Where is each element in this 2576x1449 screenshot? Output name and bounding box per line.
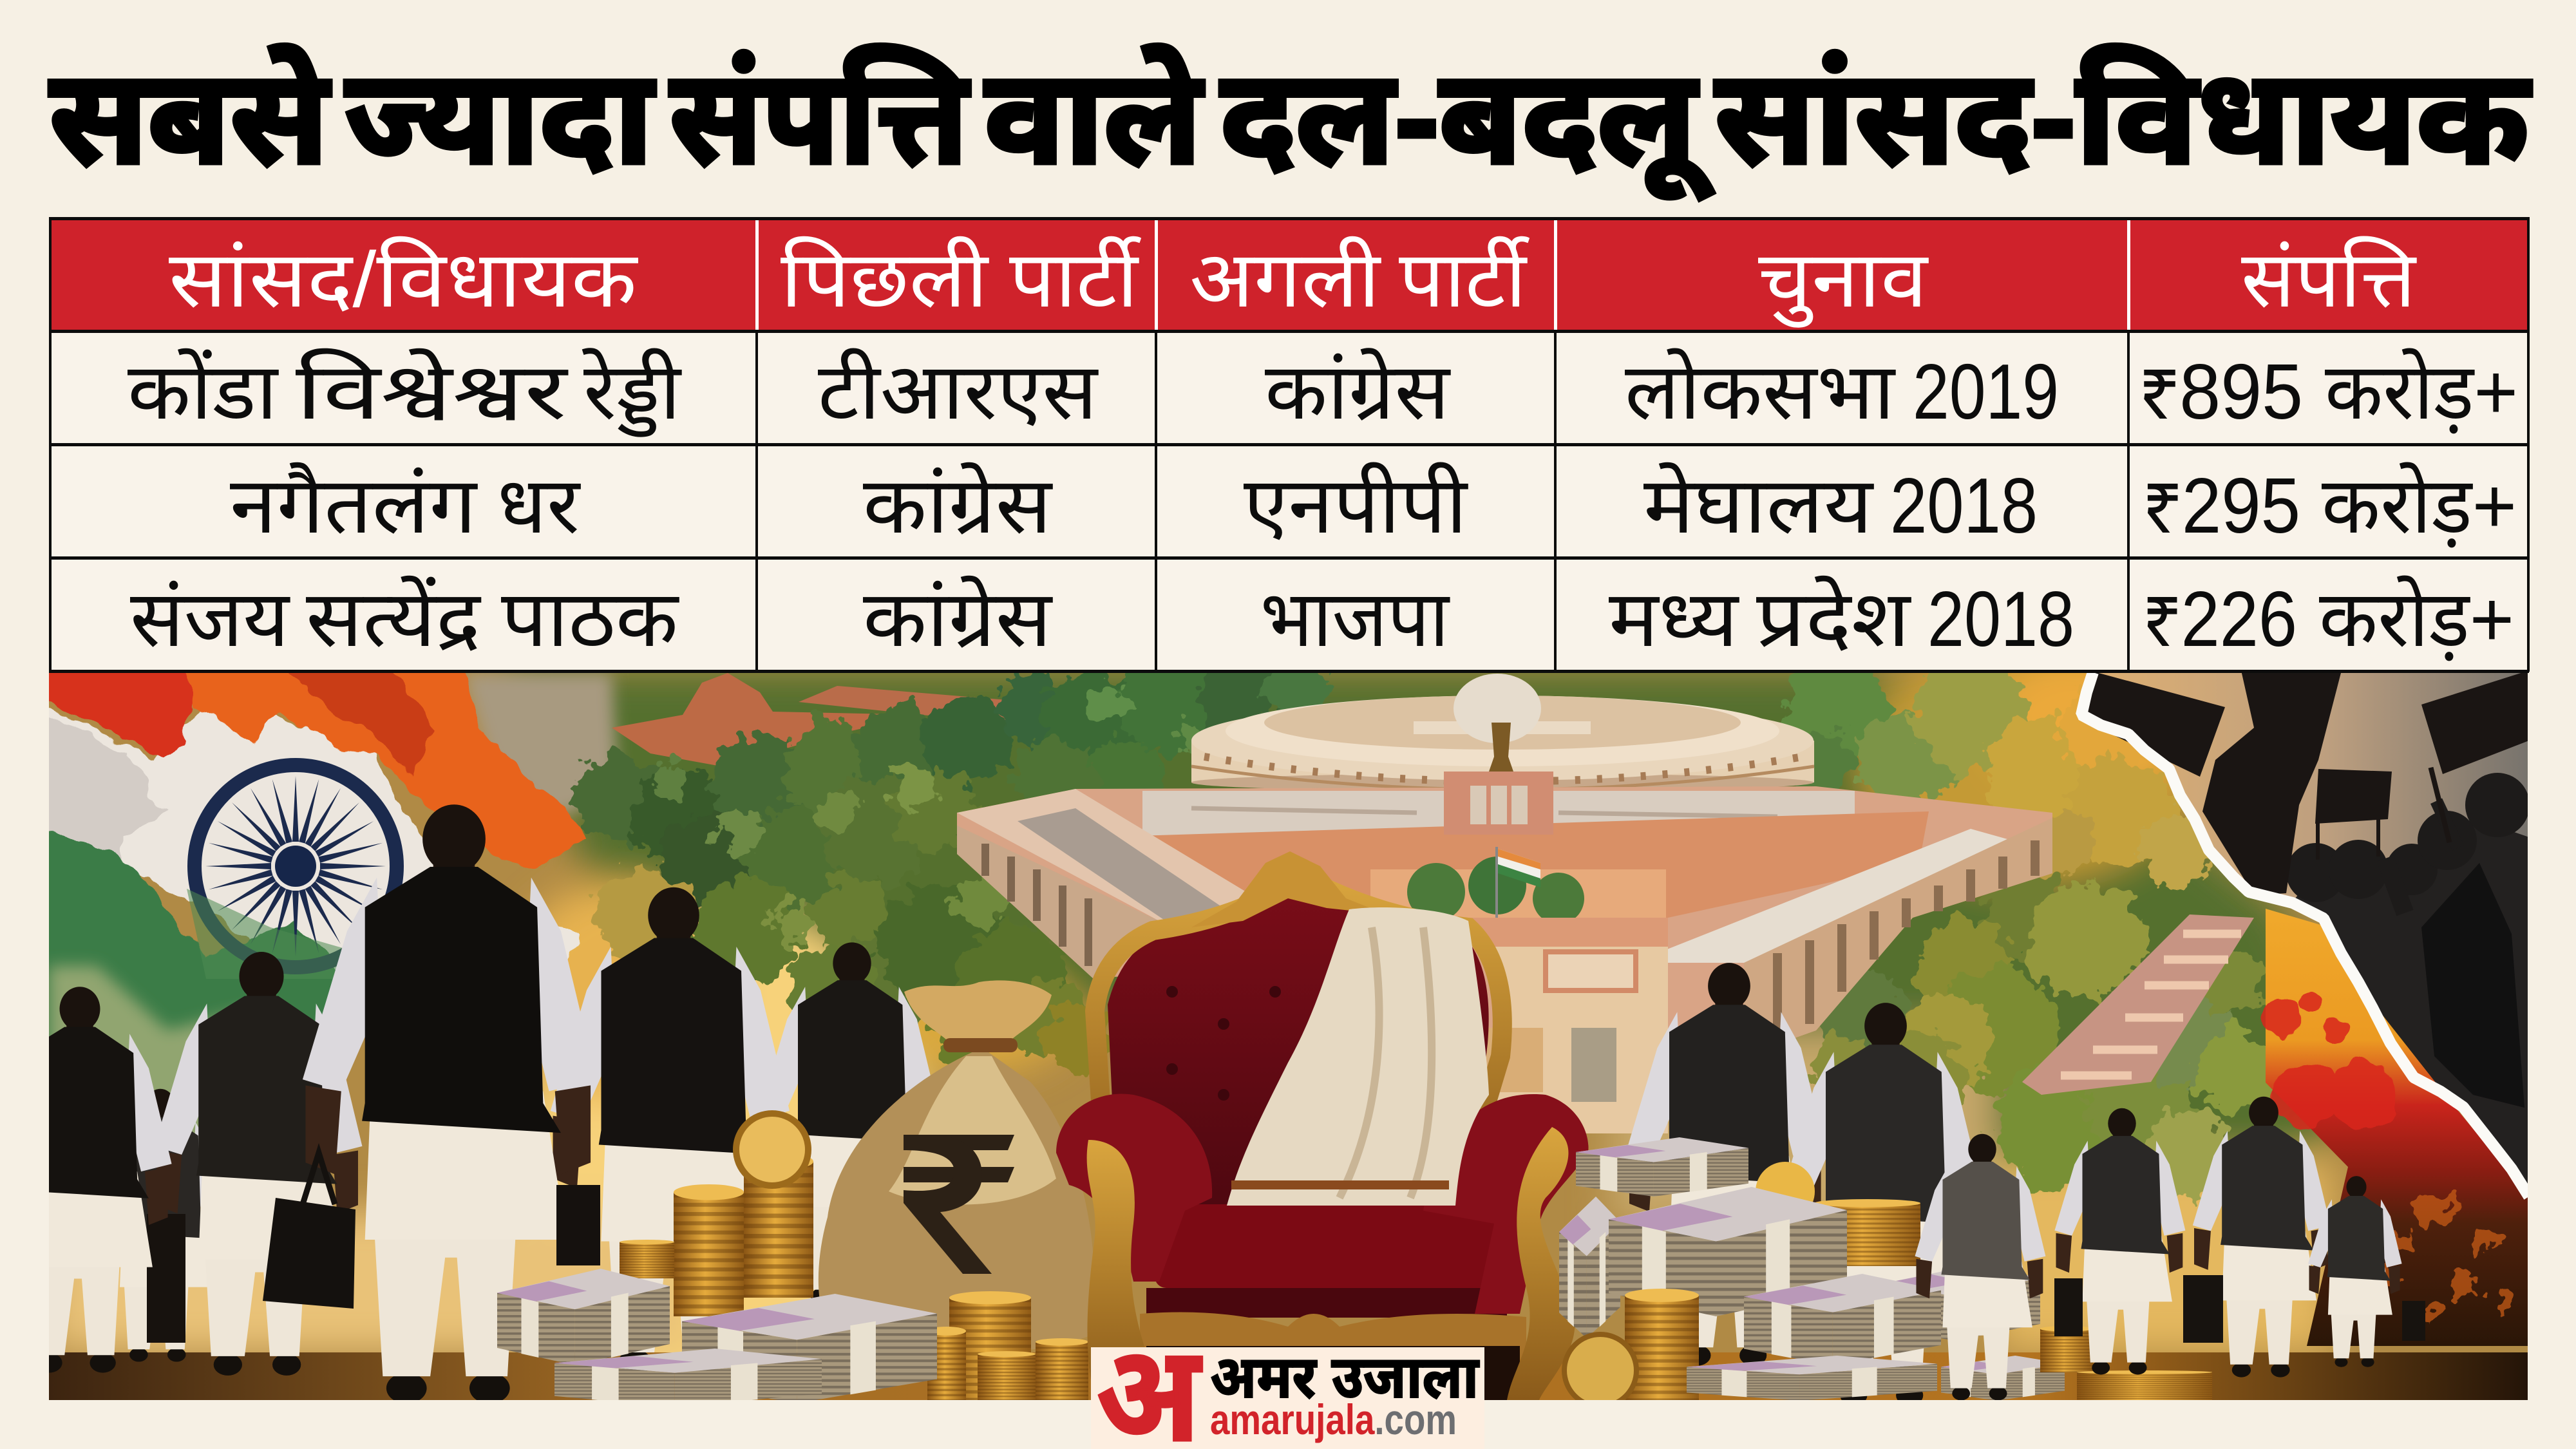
table header row: संपत्ति (2241, 236, 2418, 323)
table row 1: लोकसभा (1625, 348, 1896, 435)
men walking: distant figures (91, 1089, 225, 1362)
table row 1: कोंडा (128, 348, 279, 435)
chair crest (1191, 851, 1387, 927)
logo (1091, 1318, 1484, 1449)
table row 3: करोड़+ (2319, 575, 2514, 663)
table row 1: कांग्रेस (1265, 348, 1452, 435)
table header row (50, 220, 2528, 330)
table header row: पिछली (781, 236, 990, 323)
man 1 (0, 987, 172, 1373)
table header row: पार्टी (1399, 236, 1530, 323)
terracotta walls (1095, 811, 1929, 921)
title: वाले (985, 44, 1204, 191)
cash bundles right (1559, 1137, 2212, 1406)
table row 2: ₹295 (2143, 462, 2300, 549)
torn panel: protest crowd (2081, 670, 2530, 1197)
man 9 (2054, 1108, 2185, 1374)
table row 2: धर (497, 462, 581, 549)
table row 2: 2018 (1890, 462, 2038, 549)
table row 2 (230, 462, 2517, 549)
table row 2: कांग्रेस (863, 462, 1054, 549)
table row 1 (128, 348, 2518, 437)
man 5 (760, 942, 938, 1306)
courtyard trees and flag (1407, 847, 1584, 924)
man 10 (2183, 1097, 2331, 1378)
table header row: पार्टी (1009, 236, 1142, 323)
table row 3: भाजपा (1260, 575, 1450, 663)
front block (1385, 918, 1668, 953)
bag near man 4 (556, 1185, 600, 1265)
title: सांसद-विधायक (1715, 44, 2532, 191)
man 4 (551, 887, 790, 1374)
right arm (1423, 1094, 1588, 1314)
table row 2: करोड़+ (2322, 462, 2517, 549)
table row 1: रेड्डी (582, 348, 682, 437)
table row 1: ₹895 (2139, 348, 2303, 435)
man 11 (2308, 1176, 2425, 1367)
table row 1: 2019 (1913, 348, 2059, 435)
right wing roof (1633, 829, 2023, 963)
logo wordmark hindi: अमर उजाला (1210, 1345, 1480, 1410)
man 6 (1627, 963, 1825, 1366)
rupee symbol on bag (904, 1135, 1014, 1274)
title: संपत्ति (670, 44, 970, 191)
trees (573, 650, 2277, 1198)
table header row: सांसद/विधायक (169, 236, 639, 323)
table row 1: टीआरएस (818, 348, 1099, 435)
left wing (957, 789, 1262, 921)
illustration panel (49, 673, 2528, 1400)
bag near man 7 (1958, 1240, 2019, 1294)
logo wordmark url: amarujala.com (1210, 1396, 1457, 1443)
table body background (49, 219, 2529, 672)
seat (1155, 1204, 1496, 1288)
chair back (1108, 886, 1489, 1211)
table row 2: नगैतलंग (230, 462, 478, 549)
distant red-sandstone buildings (464, 673, 1030, 818)
rotunda (1191, 674, 1814, 791)
parliament building (957, 674, 2052, 1133)
table row 3: संजय (130, 575, 290, 663)
indian flag painting (39, 663, 589, 1159)
crowd silhouettes (2286, 773, 2530, 1197)
garden staircase (2022, 914, 2254, 1095)
table row 1: करोड़+ (2325, 348, 2518, 435)
throne chair (1056, 851, 1588, 1404)
coins stacks left (620, 1113, 1088, 1401)
logo background (1091, 1347, 1484, 1449)
left arm (1056, 1094, 1212, 1282)
ashoka chakra (187, 765, 397, 979)
roof slabs (1142, 791, 1855, 836)
table row 3: सत्येंद्र (306, 575, 481, 663)
table row 1: विश्वेश्वर (296, 348, 569, 435)
table row 3: 2018 (1927, 575, 2074, 663)
central tower and emblem (1444, 723, 1553, 835)
man 7 (1784, 1003, 1982, 1406)
man 3 large foreground with bag (263, 804, 596, 1404)
money bag (819, 980, 1094, 1353)
title: सबसे (50, 44, 331, 191)
table header row: चुनाव (1758, 236, 1929, 328)
shawl (1227, 907, 1489, 1206)
cash bundles left (497, 1269, 937, 1406)
protest flags (2081, 670, 2529, 895)
red paint splash with flames (2265, 909, 2529, 1346)
table (49, 217, 2530, 673)
title: ज्यादा (345, 44, 656, 191)
apron (1140, 1312, 1526, 1359)
table row 3: प्रदेश (1756, 575, 1911, 663)
small man 8 (1915, 1134, 2045, 1400)
table row 3 (130, 575, 2514, 663)
table row 2: एनपीपी (1244, 462, 1468, 549)
table header row: अगली (1189, 236, 1382, 323)
background glow and landscape (64, 673, 2346, 1352)
table row 3: पाठक (501, 575, 679, 663)
title: दल-बदलू (1220, 44, 1714, 200)
table row 2: मेघालय (1643, 462, 1874, 549)
floor (49, 1352, 2528, 1400)
torn paper edge (2081, 672, 2529, 1197)
table row 3: मध्य (1609, 575, 1739, 663)
man 2 (147, 952, 362, 1376)
table grid lines (49, 217, 2530, 673)
table row 3: ₹226 (2143, 575, 2297, 663)
title (50, 44, 2532, 200)
table row 3: कांग्रेस (863, 575, 1054, 663)
